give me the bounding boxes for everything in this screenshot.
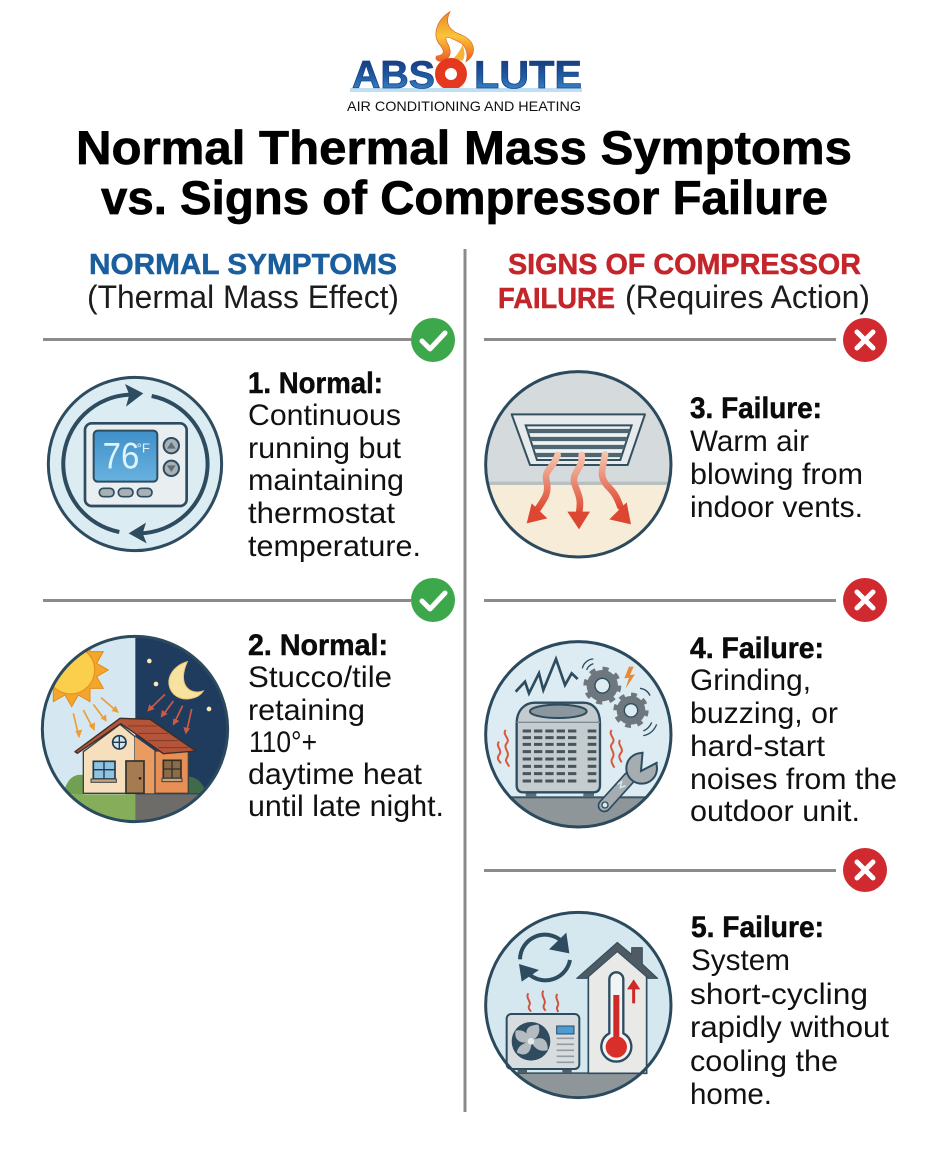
left column heading: NORMAL SYMPTOMS (89, 249, 397, 281)
item 2 divider with check badge (43, 578, 455, 622)
item 1 text: temperature. (248, 530, 421, 563)
item 2 text: retaining (248, 694, 365, 727)
logo wordmark: ABS (352, 54, 435, 97)
left column heading: (Thermal Mass Effect) (87, 279, 399, 315)
logo flame and ring (436, 12, 474, 85)
center divider (464, 249, 466, 1112)
item 1 text: maintaining (248, 464, 404, 497)
item 3 text: Warm air (690, 425, 809, 458)
icon: thermostat with cycle arrows: °F (137, 442, 150, 456)
item 1 text (248, 367, 421, 563)
title (76, 121, 852, 224)
item 4 text: Grinding, (690, 664, 811, 697)
title: Normal Thermal Mass Symptoms (76, 121, 852, 174)
item 1 divider with check badge (43, 318, 455, 362)
icon: thermostat with cycle arrows: 76 (103, 435, 139, 477)
title: vs. Signs of Compressor Failure (101, 171, 828, 224)
item 2 text: Stucco/tile (248, 661, 392, 694)
item 2 text: 2. Normal: (248, 629, 388, 662)
item 3 text: 3. Failure: (690, 392, 822, 425)
item 1 text: thermostat (248, 497, 396, 530)
right column heading (498, 249, 870, 315)
item 5 text: home. (690, 1078, 772, 1111)
item 2 text: 110°+ (249, 726, 317, 759)
item 4 text: buzzing, or (690, 697, 838, 730)
item 4 text (690, 632, 897, 828)
icon: house in day and night (35, 633, 232, 825)
item 3 divider with x badge (484, 318, 887, 362)
item 1 text: Continuous (248, 399, 401, 432)
item 4 text: outdoor unit. (690, 795, 860, 828)
logo: Absolute Air Conditioning and Heating (347, 12, 582, 114)
item 1 text: 1. Normal: (248, 367, 383, 400)
left column heading (87, 249, 399, 315)
item 4 text: hard-start (690, 730, 826, 763)
item 5 text: 5. Failure: (691, 911, 824, 944)
item 5 text: short-cycling (690, 978, 868, 1011)
item 5 divider with x badge (484, 848, 887, 892)
item 3 text: blowing from (690, 458, 863, 491)
item 2 text: until late night. (248, 790, 444, 823)
item 4 text: 4. Failure: (690, 632, 824, 665)
item 3 text: indoor vents. (690, 491, 863, 524)
item 5 text: rapidly without (690, 1011, 890, 1044)
item 4 divider with x badge (484, 578, 887, 622)
item 5 text: System (691, 944, 790, 977)
item 2 text: daytime heat (248, 758, 423, 791)
icon: thermostat with cycle arrows (48, 377, 222, 551)
logo wordmark (350, 54, 582, 97)
item 3 text (690, 392, 863, 524)
icon: warm air from vent (485, 370, 672, 565)
right column heading: SIGNS OF COMPRESSOR (508, 249, 861, 281)
icon: short-cycling unit and hot home (485, 910, 672, 1100)
icon: noisy outdoor unit (485, 640, 672, 831)
item 5 text: cooling the (690, 1045, 838, 1078)
logo tagline: AIR CONDITIONING AND HEATING (347, 98, 581, 114)
item 5 text (690, 911, 890, 1111)
logo wordmark: LUTE (474, 54, 582, 97)
item 1 text: running but (248, 432, 402, 465)
item 2 text (248, 629, 444, 823)
right column heading: (Requires Action) (625, 279, 870, 315)
item 4 text: noises from the (690, 763, 897, 796)
right column heading: FAILURE (498, 283, 615, 315)
